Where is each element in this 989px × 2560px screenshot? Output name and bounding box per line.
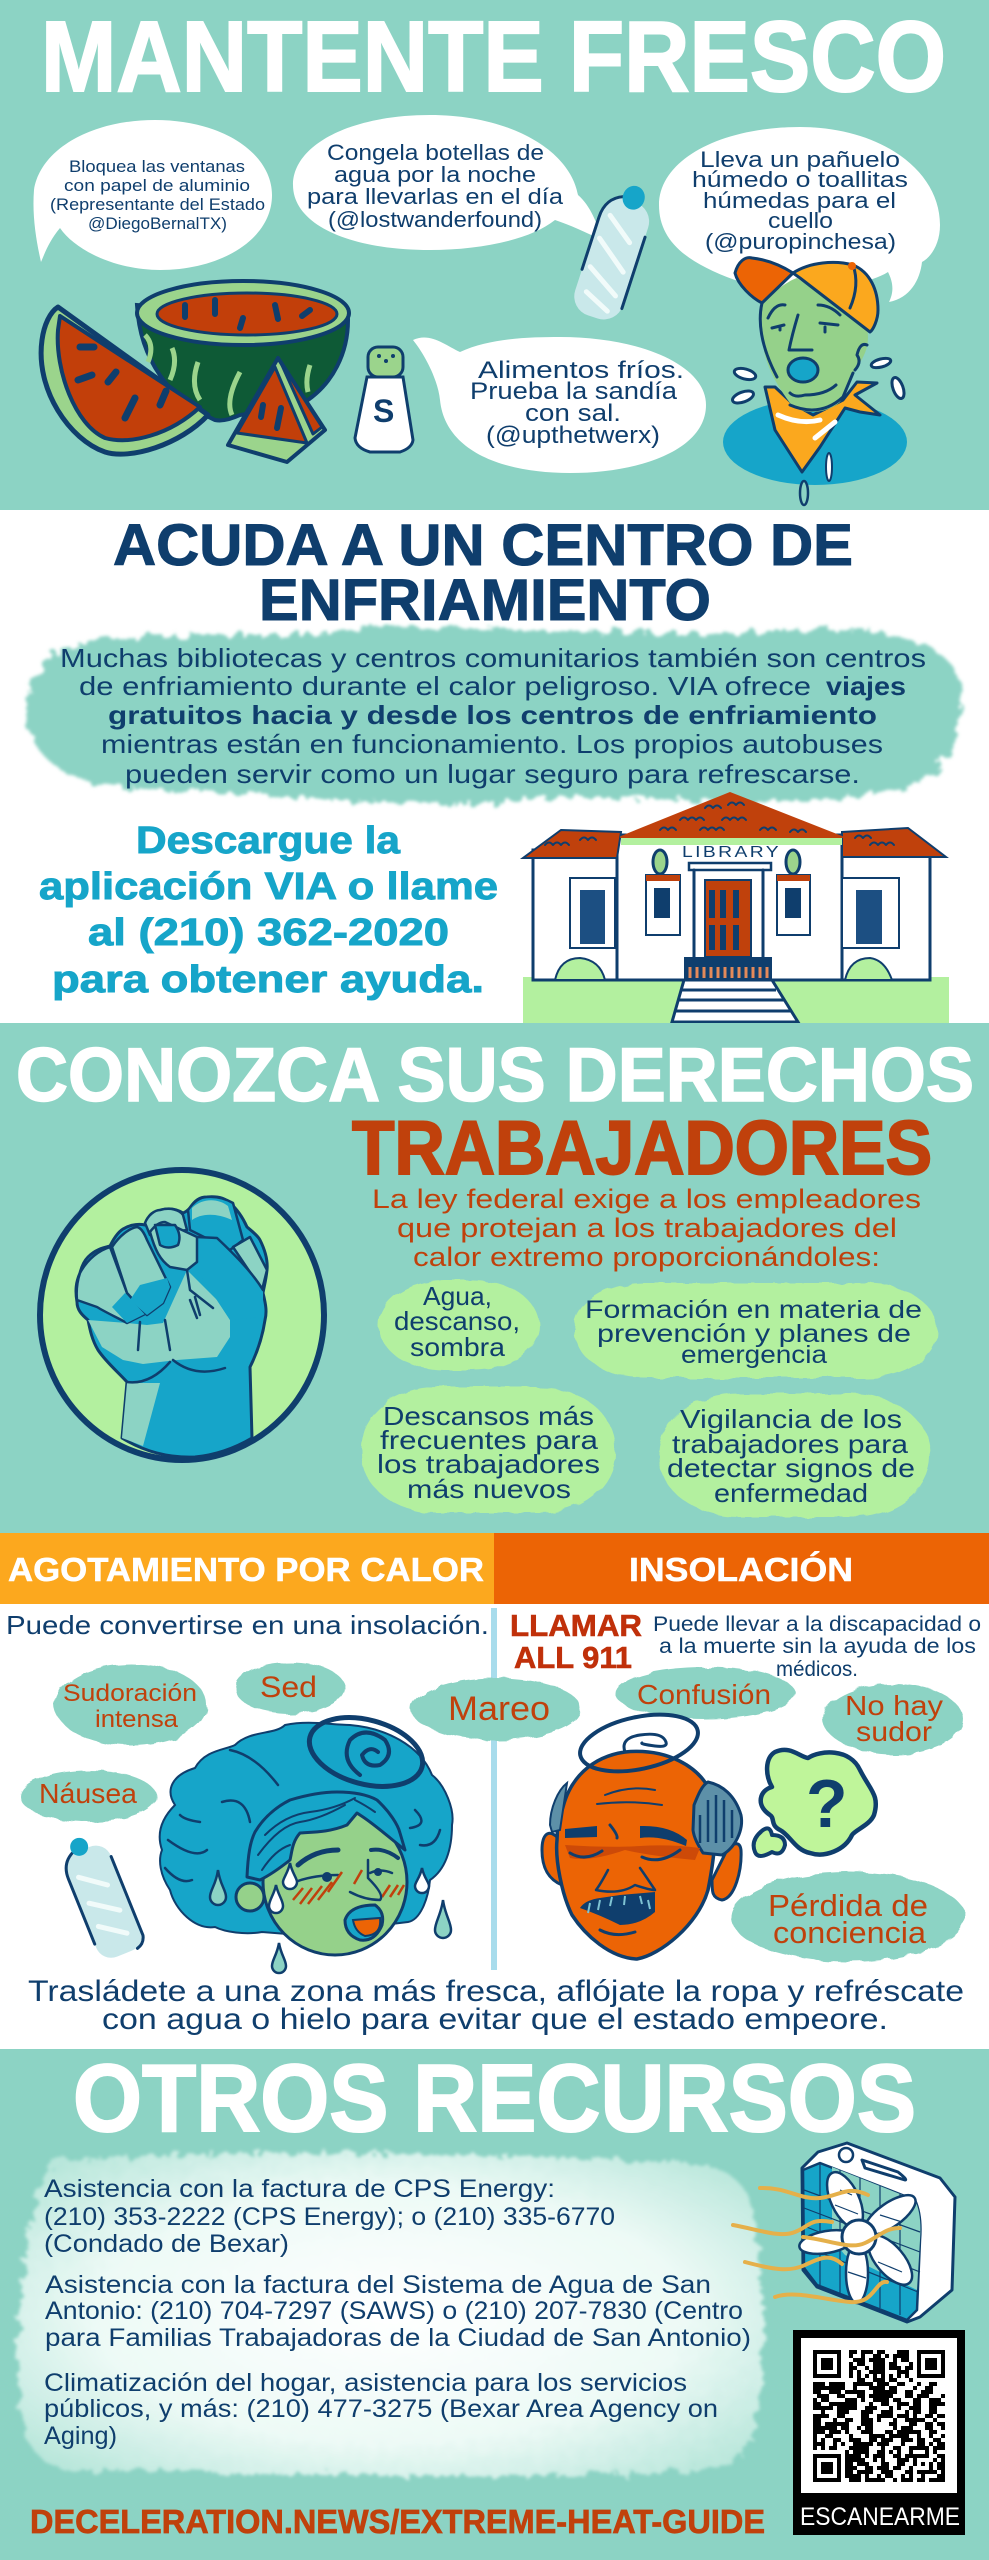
pill: agua descanso sombra [378, 1280, 539, 1370]
brush panel: resource list [18, 2154, 764, 2476]
QR code with scan label [793, 2330, 965, 2535]
panel: otros recursos [0, 2045, 989, 2560]
pill: formacion: emergencia [681, 1341, 827, 1369]
symptom: sudoracion intensa: intensa [95, 1706, 179, 1733]
pill: descansos: frecuentes para [380, 1425, 599, 1455]
illustration: sweating worker with cap and bandana [723, 258, 907, 505]
panel: heat illness comparison [0, 1533, 989, 2049]
speech bubble: frozen bottles: agua por la noche [334, 162, 536, 187]
callout: llamar al 911: ALL 911 [514, 1640, 632, 1675]
pill: descansos: Descansos más [383, 1401, 594, 1431]
pill: agua descanso sombra: sombra [410, 1332, 506, 1362]
icon: water bottle 2 [55, 1829, 147, 1963]
speech bubble: frozen bottles: Congela botellas de [327, 140, 544, 165]
icon: salt shaker: S [373, 393, 394, 429]
heading: otros recursos: OTROS RECURSOS [73, 2045, 916, 2152]
speech bubble: wet bandana: (@puropinchesa) [705, 229, 896, 254]
resource: CPS Energy: (210) 353-2222 (CPS Energy); o (210) 335-6770 [44, 2203, 615, 2231]
symptom: mareo: Mareo [448, 1690, 550, 1728]
symptom: perdida de conciencia [731, 1872, 965, 1962]
call to action: VIA app: Descargue la [136, 820, 401, 862]
speech bubble: frozen bottles: (@lostwanderfound) [328, 207, 542, 232]
link: deceleration news guide: DECELERATION.NEWS/EXTREME-HEAT-GUIDE [30, 2503, 765, 2540]
symptom: nausea [20, 1770, 156, 1822]
pill: descansos [361, 1387, 615, 1513]
brush blob with paragraph: viajes [826, 671, 906, 701]
resource: CPS Energy [44, 2175, 615, 2258]
symptom: no hay sudor [823, 1684, 963, 1754]
symptom: confusion: Confusión [637, 1679, 771, 1710]
icon: thought cloud with question mark: ? [806, 1766, 848, 1842]
speech bubble: foil on windows: @DiegoBernalTX) [88, 215, 227, 233]
header: agotamiento por calor: AGOTAMIENTO POR CALOR [8, 1551, 484, 1588]
heading: trabajadores: TRABAJADORES [352, 1106, 932, 1191]
call to action: VIA app: para obtener ayuda. [52, 959, 484, 1001]
text block: federal law: que protejan a los trabajadores del [397, 1213, 897, 1243]
pill: formacion [574, 1283, 937, 1378]
resource: SAWS: Asistencia con la factura del Sistema de Agua de San [45, 2271, 711, 2299]
panel: conozca sus derechos [0, 1023, 989, 1533]
resource: CPS Energy: (Condado de Bexar) [44, 2230, 289, 2258]
icon: watermelon slice large [41, 307, 208, 454]
speech bubble: wet bandana [659, 127, 940, 302]
symptom: no hay sudor: No hay [845, 1690, 943, 1721]
symptom: sudoracion intensa: Sudoración [63, 1680, 197, 1707]
resource: SAWS [45, 2271, 751, 2352]
icon: raised fist in circle [40, 1170, 324, 1460]
pill: descansos: más nuevos [407, 1474, 571, 1504]
text: heat stroke note: Puede llevar a la discapacidad o [653, 1613, 981, 1636]
label: escanearme: ESCANEARME [800, 2503, 960, 2531]
resource: Bexar Area Agency on Aging [44, 2369, 718, 2450]
header: agotamiento por calor [0, 1533, 494, 1604]
resource: SAWS: para Familias Trabajadoras de la Ciudad de San Antonio) [45, 2324, 751, 2352]
call to action: VIA app: aplicación VIA o llame [39, 866, 498, 908]
resource: Bexar Area Agency on Aging: Aging) [44, 2422, 117, 2450]
pill: descansos: los trabajadores [377, 1449, 600, 1479]
icon: box fan [733, 2143, 955, 2322]
header: insolacion [494, 1533, 989, 1604]
text: heat stroke note [653, 1613, 981, 1681]
text block: federal law: La ley federal exige a los empleadores [372, 1184, 921, 1214]
brush blob with paragraph [27, 627, 962, 804]
text: treatment advice [28, 1975, 964, 2036]
speech bubble: cold foods: (@upthetwerx) [486, 422, 660, 449]
text: treatment advice: con agua o hielo para evitar que el estado empeore. [102, 2003, 888, 2036]
text block: federal law [372, 1184, 921, 1272]
brush blob with paragraph: de enfriamiento durante el calor peligroso. VIA ofrece [79, 671, 811, 701]
icon: watermelon bowl [137, 281, 349, 420]
illustration: man with heat stroke [542, 1705, 742, 1959]
resource: Bexar Area Agency on Aging: Climatización del hogar, asistencia para los servicios [44, 2369, 687, 2397]
sign: library: LIBRARY [682, 844, 781, 861]
speech bubble: cold foods: Prueba la sandía [470, 378, 678, 405]
heading: acuda a un centro de enfriamiento: ACUDA A UN CENTRO DE [113, 513, 853, 578]
call to action: VIA app [39, 820, 498, 1001]
speech bubble: cold foods: con sal. [525, 400, 621, 427]
speech bubble: cold foods [413, 337, 706, 473]
panel: mantente fresco [0, 0, 989, 510]
pill: vigilancia: enfermedad [714, 1478, 868, 1508]
speech bubble: frozen bottles: para llevarlas en el día [307, 184, 564, 209]
text: treatment advice: Trasládete a una zona más fresca, aflójate la ropa y refréscate [28, 1975, 964, 2008]
brush blob with paragraph: gratuitos hacia y desde los centros de enfriamiento [108, 700, 877, 730]
icon: salt shaker [355, 347, 413, 452]
symptom: perdida de conciencia: conciencia [773, 1915, 927, 1950]
header: insolacion: INSOLACIÓN [629, 1551, 853, 1588]
QR modules [813, 2352, 945, 2480]
text block: federal law: calor extremo proporcionándoles: [413, 1242, 880, 1272]
callout: llamar al 911: LLAMAR [510, 1608, 642, 1643]
speech bubble: cold foods: Alimentos fríos. [478, 357, 684, 384]
pill: vigilancia: trabajadores para [672, 1429, 909, 1459]
illustration: woman with heat exhaustion [160, 1706, 453, 1973]
symptom: nausea: Náusea [39, 1778, 137, 1809]
brush blob with paragraph: Muchas bibliotecas y centros comunitarios también son centros [60, 643, 926, 673]
symptom: confusion [615, 1667, 795, 1719]
panel: centro de enfriamiento [0, 510, 989, 1023]
callout: llamar al 911 [510, 1608, 642, 1675]
pill: agua descanso sombra: Agua, [423, 1281, 492, 1311]
speech bubble: wet bandana: húmedas para el [703, 188, 896, 213]
icon: water bottle [569, 178, 659, 325]
pill: formacion: prevención y planes de [597, 1320, 911, 1348]
icon: thought cloud with question mark [754, 1750, 876, 1856]
text: heat stroke note: médicos. [776, 1658, 858, 1681]
symptom: no hay sudor: sudor [856, 1716, 932, 1747]
speech bubble: foil on windows: (Representante del Estado [50, 196, 265, 214]
illustration: library building [523, 793, 949, 1023]
pill: vigilancia: detectar signos de [667, 1453, 915, 1483]
pill: agua descanso sombra: descanso, [394, 1306, 520, 1336]
heading: acuda a un centro de enfriamiento [113, 513, 853, 633]
text: heat stroke note: a la muerte sin la ayuda de los [659, 1635, 976, 1658]
text: heat exhaustion note: Puede convertirse en una insolación. [6, 1610, 489, 1640]
speech bubble: wet bandana: cuello [768, 208, 833, 233]
pill: vigilancia [659, 1393, 930, 1517]
icon: watermelon slice small [228, 358, 325, 462]
symptom: sudoracion intensa [55, 1664, 207, 1746]
speech bubble: foil on windows: con papel de aluminio [64, 177, 250, 195]
pill: formacion: Formación en materia de [585, 1296, 922, 1324]
symptom: mareo [411, 1678, 581, 1740]
resource: CPS Energy: Asistencia con la factura de CPS Energy: [44, 2175, 555, 2203]
speech bubble: frozen bottles [293, 115, 602, 250]
symptom: sed [235, 1662, 345, 1714]
symptom: perdida de conciencia: Pérdida de [768, 1888, 928, 1923]
resource: SAWS: Antonio: (210) 704-7297 (SAWS) o (210) 207-7830 (Centro [45, 2297, 743, 2325]
heading: acuda a un centro de enfriamiento: ENFRIAMIENTO [259, 568, 711, 633]
brush blob with paragraph: mientras están en funcionamiento. Los propios autobuses [101, 729, 883, 759]
speech bubble: wet bandana: húmedo o toallitas [692, 167, 908, 192]
speech bubble: foil on windows [33, 120, 272, 270]
symptom: sed: Sed [260, 1671, 317, 1704]
resource: Bexar Area Agency on Aging: públicos, y más: (210) 477-3275 (Bexar Area Agency on [44, 2395, 718, 2423]
speech bubble: foil on windows: Bloquea las ventanas [69, 158, 245, 176]
pill: vigilancia: Vigilancia de los [680, 1404, 902, 1434]
brush blob with paragraph: pueden servir como un lugar seguro para refrescarse. [125, 759, 860, 789]
speech bubble: wet bandana: Lleva un pañuelo [700, 147, 900, 172]
call to action: VIA app: al (210) 362-2020 [88, 912, 449, 954]
